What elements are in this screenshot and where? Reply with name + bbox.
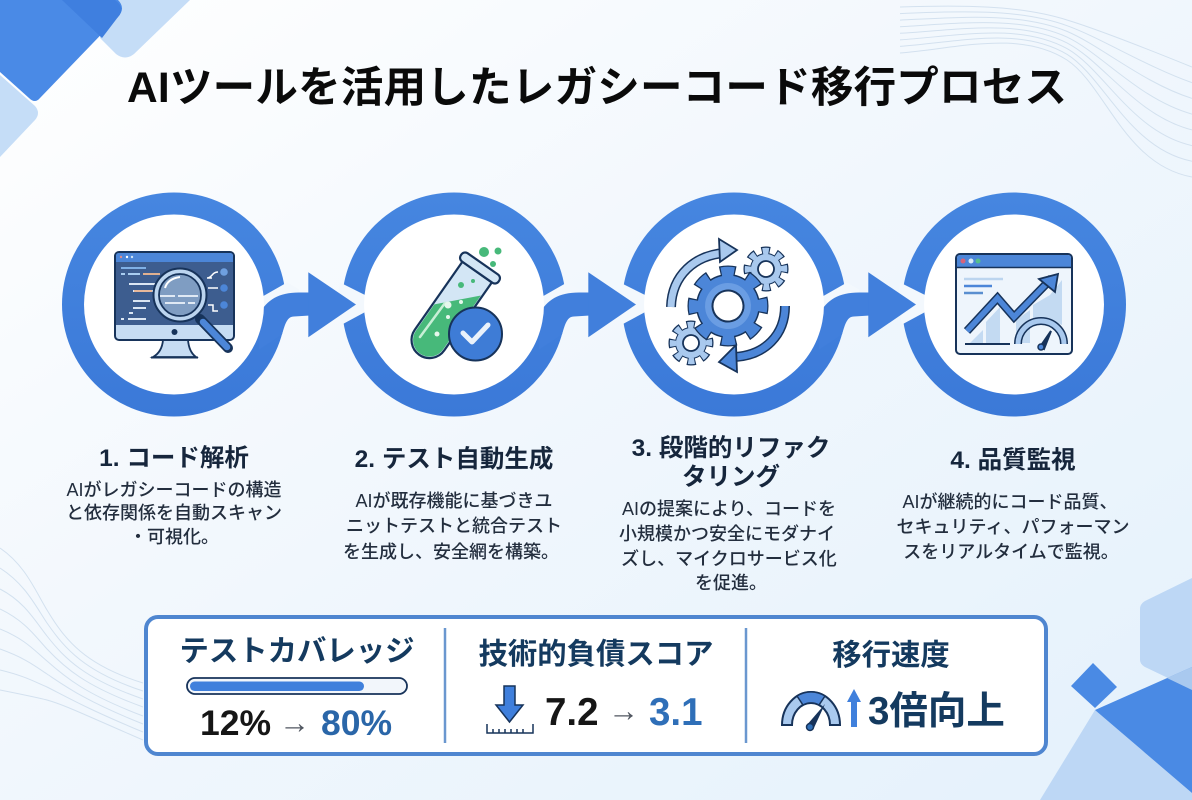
description 1: AIがレガシーコードの構造 xyxy=(66,479,282,500)
metric: technical debt score: → xyxy=(608,693,639,728)
arrow 1 to 2 xyxy=(308,272,356,337)
description 4 xyxy=(897,491,1129,562)
description 2: を生成し、安全網を構築。 xyxy=(343,542,559,562)
description 3: AIの提案により、コードを xyxy=(622,499,836,519)
step 3 ring with connector xyxy=(618,192,870,416)
metrics panel xyxy=(146,617,1046,754)
icon: monitor with magnifier xyxy=(115,252,234,358)
step 4 ring xyxy=(898,192,1126,416)
description 2: ニットテストと統合テスト xyxy=(346,516,562,536)
description 2: AIが既存機能に基づきユ xyxy=(355,490,553,511)
decoration: bottom-right shapes xyxy=(1040,578,1192,800)
metric: technical debt score: 7.2 xyxy=(545,691,599,734)
icon: test tube with check xyxy=(400,247,502,368)
metric: migration speed: 移行速度 xyxy=(832,639,950,672)
description 4: スをリアルタイムで監視。 xyxy=(903,542,1119,562)
icon: gears with cycle arrows xyxy=(669,239,788,372)
heading 2: 2. テスト自動生成 xyxy=(355,445,553,473)
metric: technical debt score xyxy=(478,638,714,734)
description 2 xyxy=(343,490,562,562)
progress bar xyxy=(187,678,407,694)
heading 1: 1. コード解析 xyxy=(99,444,249,472)
decoration: top-left shapes xyxy=(0,0,190,157)
step 1 text xyxy=(66,444,282,547)
metric: test coverage xyxy=(179,635,415,743)
heading 4: 4. 品質監視 xyxy=(950,446,1076,474)
description 3 xyxy=(619,499,837,593)
title: AIツールを活用したレガシーコード移行プロセス xyxy=(127,65,1067,112)
step 2 ring with connector xyxy=(338,192,590,416)
heading 3: 3. 段階的リファク xyxy=(632,434,830,462)
heading 3 xyxy=(632,434,830,491)
description 3: を促進。 xyxy=(695,573,767,593)
icon: down arrow on ruler xyxy=(487,686,533,733)
description 4: AIが継続的にコード品質、 xyxy=(902,491,1118,512)
heading 3: タリング xyxy=(682,462,780,491)
description 4: セキュリティ、パフォーマン xyxy=(897,517,1129,537)
step 1 ring with connector xyxy=(62,192,310,416)
icon: gauge with up arrow xyxy=(782,689,861,730)
description 1: ・可視化。 xyxy=(129,527,219,547)
step 2 text xyxy=(343,445,562,562)
metric: test coverage: テストカバレッジ xyxy=(179,635,415,668)
metric: migration speed: 3倍向上 xyxy=(868,690,1005,733)
metric: technical debt score: 技術的負債スコア xyxy=(478,638,714,671)
description 3: ズし、マイクロサービス化 xyxy=(621,548,837,569)
metric: test coverage: → xyxy=(279,705,310,740)
metric: test coverage: 80% xyxy=(321,703,392,743)
description 3: 小規模かつ安全にモダナイ xyxy=(619,524,835,544)
arrow 3 to 4 xyxy=(868,272,916,337)
icon: dashboard window xyxy=(956,254,1072,354)
arrow 2 to 3 xyxy=(588,272,636,337)
description 1: と依存関係を自動スキャン xyxy=(66,503,282,523)
metric: technical debt score: 3.1 xyxy=(649,691,703,734)
step 4 text xyxy=(897,446,1129,562)
description 1 xyxy=(66,479,282,547)
step 3 text xyxy=(619,434,837,593)
metric: migration speed xyxy=(782,639,1005,733)
metric: test coverage: 12% xyxy=(200,703,271,743)
